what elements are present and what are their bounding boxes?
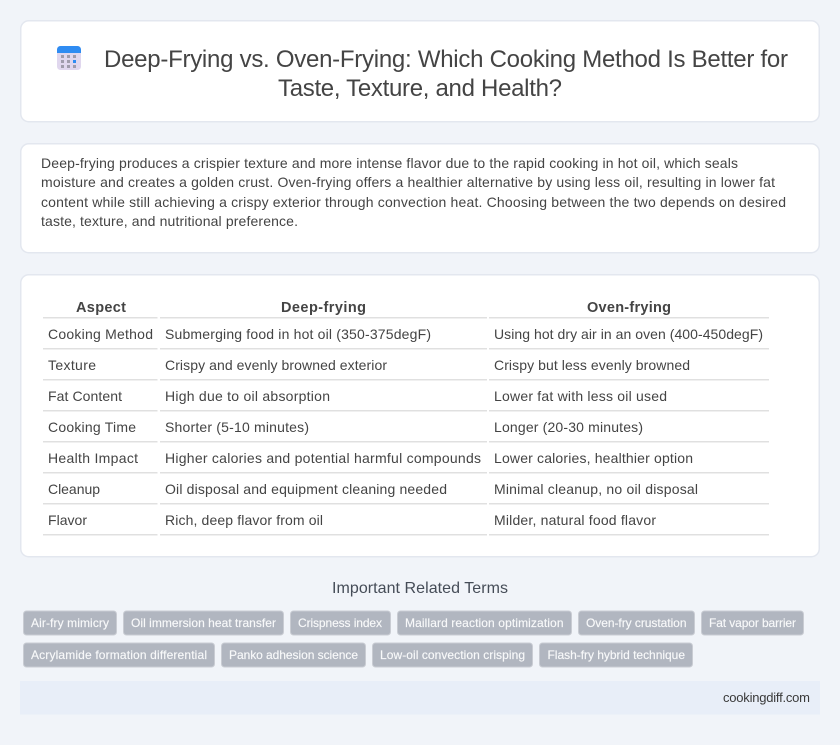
row: fat content: Lower fat with less oil used bbox=[494, 388, 667, 404]
table row lines bbox=[43, 317, 769, 536]
tags: related terms: Maillard reaction optimization bbox=[405, 616, 564, 630]
row: cooking time bbox=[48, 419, 643, 435]
tags: related terms: Oven-fry crustation bbox=[586, 616, 686, 630]
row: cleanup: Oil disposal and equipment cleaning needed bbox=[165, 481, 447, 497]
tags: related terms: Low-oil convection crisping bbox=[380, 648, 525, 662]
icon: calendar bbox=[57, 46, 81, 70]
title: Deep-Frying vs. Oven-Frying: Which Cooking Method Is Better for bbox=[104, 46, 788, 73]
tags: related terms bbox=[24, 611, 804, 667]
text block: introduction bbox=[41, 155, 786, 229]
tags: related terms: Fat vapor barrier bbox=[709, 616, 796, 630]
text block: introduction: content while still achieving a crispy exterior through convection heat. Choosing between the two depends on desired bbox=[41, 194, 786, 210]
row: fat content: High due to oil absorption bbox=[165, 388, 330, 404]
table header: Oven-frying bbox=[587, 300, 671, 316]
row: flavor: Rich, deep flavor from oil bbox=[165, 512, 323, 528]
row: flavor: Milder, natural food flavor bbox=[494, 512, 656, 528]
title: Taste, Texture, and Health? bbox=[278, 75, 562, 102]
row: health impact bbox=[48, 450, 693, 466]
row: health impact: Health Impact bbox=[48, 450, 138, 466]
row: fat content: Fat Content bbox=[48, 388, 122, 404]
row: health impact: Higher calories and potential harmful compounds bbox=[165, 450, 481, 466]
text block: introduction: Deep-frying produces a crispier texture and more intense flavor due to the rapid cooking in hot oil, which seals bbox=[41, 155, 738, 171]
row: fat content bbox=[48, 388, 667, 404]
footer: cookingdiff.com bbox=[723, 690, 810, 705]
tags: related terms: Oil immersion heat transfer bbox=[131, 616, 276, 630]
row: flavor bbox=[48, 512, 656, 528]
footer bbox=[20, 681, 820, 714]
table header bbox=[76, 300, 671, 316]
panel: introduction bbox=[21, 144, 819, 253]
row: cooking time: Cooking Time bbox=[48, 419, 136, 435]
tags: related terms: Air-fry mimicry bbox=[31, 616, 109, 630]
row: flavor: Flavor bbox=[48, 512, 87, 528]
title bbox=[104, 46, 788, 102]
row: cleanup bbox=[48, 481, 698, 497]
panel: title card bbox=[21, 21, 819, 122]
row: cleanup: Cleanup bbox=[48, 481, 100, 497]
row: texture: Texture bbox=[48, 357, 96, 373]
row: texture: Crispy but less evenly browned bbox=[494, 357, 690, 373]
table header: Deep-frying bbox=[281, 300, 366, 316]
tags: related terms: Crispness index bbox=[298, 616, 382, 630]
row: cooking time: Shorter (5-10 minutes) bbox=[165, 419, 309, 435]
heading: related terms: Important Related Terms bbox=[332, 580, 508, 597]
text block: introduction: moisture and creates a golden crust. Oven-frying offers a healthier alternative by using less oil, resulting in lower fat bbox=[41, 174, 775, 190]
text block: introduction: taste, texture, and nutritional preference. bbox=[41, 213, 298, 229]
row: cooking time: Longer (20-30 minutes) bbox=[494, 419, 643, 435]
row: texture: Crispy and evenly browned exterior bbox=[165, 357, 387, 373]
row: cleanup: Minimal cleanup, no oil disposal bbox=[494, 481, 698, 497]
row: cooking method: Using hot dry air in an oven (400-450degF) bbox=[494, 326, 763, 342]
row: cooking method: Cooking Method bbox=[48, 326, 153, 342]
tags: related terms: Flash-fry hybrid technique bbox=[548, 648, 685, 662]
row: texture bbox=[48, 357, 690, 373]
panel: comparison table bbox=[21, 275, 819, 557]
row: cooking method bbox=[48, 326, 763, 342]
tags: related terms: Panko adhesion science bbox=[229, 648, 358, 662]
row: health impact: Lower calories, healthier option bbox=[494, 450, 693, 466]
row: cooking method: Submerging food in hot oil (350-375degF) bbox=[165, 326, 431, 342]
tags: related terms: Acrylamide formation differential bbox=[31, 648, 207, 662]
table header: Aspect bbox=[76, 300, 126, 316]
